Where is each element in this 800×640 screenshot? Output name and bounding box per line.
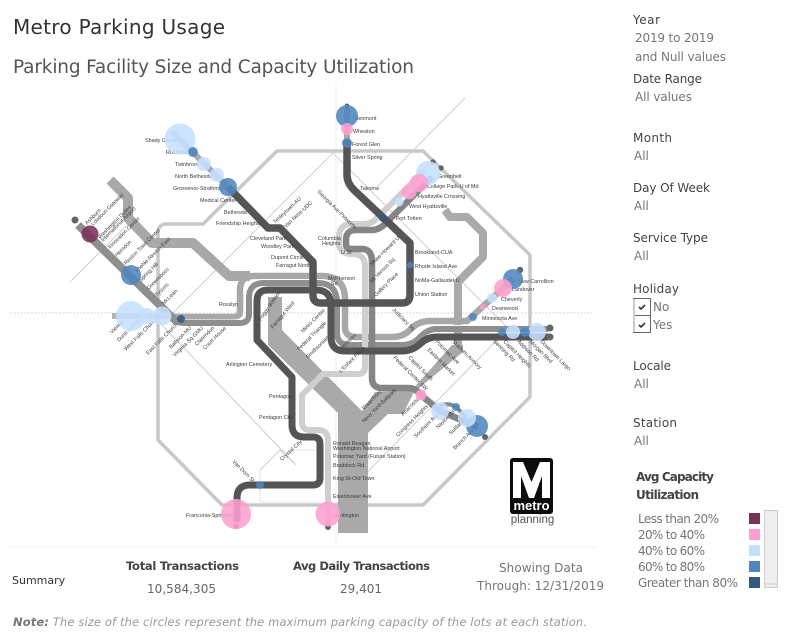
filter: station: Station xyxy=(633,416,677,430)
station labels: Morgan Blvd xyxy=(528,339,553,365)
station labels: Deanwood xyxy=(492,306,518,312)
station labels: Braddock Rd xyxy=(333,463,364,469)
station labels: Rhode Island Ave xyxy=(415,264,457,270)
filter: day of week: Day Of Week xyxy=(633,181,710,195)
station labels: Southern Ave xyxy=(413,412,440,439)
orange line xyxy=(110,180,250,276)
legend: avg capacity utilization: Utilization xyxy=(636,488,699,502)
filter: year: and Null values xyxy=(635,50,726,64)
station labels: Crystal City xyxy=(279,439,304,462)
station labels: West Hyattsville xyxy=(409,204,447,210)
data date note xyxy=(476,561,604,593)
station labels: International Airport xyxy=(100,206,138,243)
station labels: Washington Dulles xyxy=(97,204,133,240)
subtitle: Parking Facility Size and Capacity Utilization xyxy=(13,57,414,78)
station labels: Addison Rd xyxy=(516,339,540,363)
green line xyxy=(346,177,478,427)
station labels: Bethesda xyxy=(224,210,247,216)
station labels: Tenleytown-AU xyxy=(272,196,303,225)
footnote: Note: The size of the circles represent the maximum parking capacity of the lots at each station. xyxy=(13,615,587,629)
station labels: Anacostia xyxy=(400,396,421,417)
circle: Branch Ave xyxy=(466,415,488,437)
filter: day of week: All xyxy=(634,199,649,213)
beltway xyxy=(158,151,530,505)
metro planning logo xyxy=(510,458,554,526)
circle: Grosvenor-Strathmore xyxy=(219,178,237,196)
station labels: Ballston-MU xyxy=(168,325,193,350)
station labels: Branch Ave xyxy=(452,428,476,451)
station labels: Benning Rd xyxy=(492,339,516,363)
station labels: McLean xyxy=(161,289,179,306)
legend: avg capacity utilization: Greater than 80% xyxy=(638,576,738,590)
station labels: Naylor Rd xyxy=(435,409,456,430)
filter: locale: All xyxy=(634,377,649,391)
circle: Franconia-Springfield xyxy=(221,499,251,529)
station labels: Suitland xyxy=(448,418,466,436)
filter: station xyxy=(633,416,677,448)
station labels: Franconia-Springfield xyxy=(186,513,237,519)
station labels: Twinbrook xyxy=(175,162,200,168)
filter: month: All xyxy=(634,149,649,163)
filter: service type: All xyxy=(634,249,649,263)
station labels: Innovation Center xyxy=(107,216,142,250)
white separator xyxy=(183,280,500,341)
circle: Huntington xyxy=(316,502,340,526)
filter: holiday: Holiday xyxy=(633,282,679,296)
station labels: Wiehle-Reston East xyxy=(134,236,172,274)
legend: avg capacity utilization: 40% to 60% xyxy=(638,544,705,558)
station labels: Herndon xyxy=(114,240,133,258)
station labels: Navy Yard-Ballpark xyxy=(361,387,398,424)
circle: Forest Glen xyxy=(342,138,352,148)
station labels: Sq xyxy=(331,281,338,287)
station labels: Eastern Market xyxy=(426,347,456,378)
station labels: Pentagon xyxy=(269,394,292,400)
station labels: Heights xyxy=(322,241,341,247)
station labels: Spring Hill xyxy=(138,262,160,283)
station labels: Farragut North xyxy=(276,263,311,269)
station labels: Takoma xyxy=(360,186,379,192)
station labels: Virginia Sq-GMU xyxy=(172,326,205,358)
circle: Deanwood xyxy=(480,304,486,310)
circle: Suitland xyxy=(458,409,476,427)
data date note: Through: 12/31/2019 xyxy=(476,579,604,593)
station labels: Metro Center xyxy=(300,308,327,334)
station labels: Van Dorn St xyxy=(231,459,256,484)
circle: Glenmont xyxy=(336,105,358,127)
circle: Morgan Blvd xyxy=(520,327,530,337)
circle: North Bethesda xyxy=(210,168,224,182)
station labels: Washington National Airport xyxy=(333,446,400,452)
station labels: Rockville xyxy=(166,150,188,156)
station labels: Federal Triangle xyxy=(296,321,328,352)
station labels: Hyattsville Crossing xyxy=(418,194,465,200)
legend: avg capacity utilization xyxy=(636,470,778,590)
circle: New Carrollton xyxy=(503,269,523,289)
station labels: Cleveland Park xyxy=(250,236,287,242)
filter: holiday: Yes xyxy=(652,318,672,332)
filter: date range xyxy=(633,72,702,104)
station labels: Farragut West xyxy=(270,300,297,330)
data date note: Showing Data xyxy=(499,561,583,575)
circle: West Falls Church xyxy=(152,306,172,326)
KPI: average daily transactions: 29,401 xyxy=(340,582,382,596)
circle: Van Dorn St xyxy=(256,481,264,489)
station labels: Archives xyxy=(339,332,358,351)
circle: Rockville xyxy=(188,147,198,157)
station labels: Congress Heights xyxy=(395,404,430,438)
circle: Shady Grove xyxy=(164,124,196,154)
circle: West Hyattsville xyxy=(394,198,404,206)
station labels: Georgia Ave-Petworth xyxy=(316,189,357,231)
station labels: Waterfront xyxy=(361,389,383,411)
circle: Addison Rd xyxy=(506,325,520,339)
red line upper segments xyxy=(172,108,347,187)
metro planning logo: planning xyxy=(511,514,554,526)
station labels: Forest Glen xyxy=(352,142,380,148)
silver line xyxy=(175,283,548,345)
circle: Southern Ave xyxy=(431,402,449,420)
station labels: Potomac Yard (Future Station) xyxy=(333,454,406,460)
station labels: Capitol Heights xyxy=(502,339,532,369)
circle: Spring Hill xyxy=(121,265,141,285)
metro planning logo: metro xyxy=(513,498,550,513)
station labels: Grosvenor-Strathmore xyxy=(173,186,227,192)
silver line west diagonal xyxy=(78,225,177,322)
circle: Wheaton xyxy=(341,123,353,135)
station badges xyxy=(72,104,554,530)
station labels: Landover xyxy=(512,287,535,293)
circle: Downtown Largo xyxy=(528,323,546,341)
purple line xyxy=(445,210,483,345)
blue line xyxy=(237,290,548,522)
station labels: Clarendon xyxy=(194,326,216,347)
station labels: Shady Grove xyxy=(145,138,176,144)
circle: Hyattsville Crossing xyxy=(402,184,416,200)
station labels: Rosslyn xyxy=(219,302,238,308)
circle: College Park xyxy=(410,174,428,192)
station labels: Columbia xyxy=(318,236,341,242)
filter: holiday xyxy=(633,282,679,332)
station labels: Arlington Cemetery xyxy=(226,362,272,368)
circle: Capitol Heights xyxy=(498,328,506,336)
station labels: McPherson xyxy=(328,276,355,282)
filter: year: 2019 to 2019 xyxy=(635,31,714,45)
DC boundary and river lines xyxy=(70,98,520,503)
station labels: Dupont Circle xyxy=(271,255,304,261)
station labels: Silver Spring xyxy=(352,155,383,161)
station labels: Foggy Bottom xyxy=(258,291,282,322)
station labels: College Park-U of Md xyxy=(427,184,479,190)
KPI: total transactions xyxy=(126,559,239,596)
station labels: Shaw-Howard U xyxy=(369,235,401,267)
station labels: Ashburn xyxy=(84,208,103,226)
station labels: Dunn Loring xyxy=(116,318,141,343)
station labels: Mt Vernon Sq xyxy=(369,257,397,284)
legend: avg capacity utilization: 20% to 40% xyxy=(638,528,705,542)
station labels: West Falls Church xyxy=(123,317,158,352)
station labels: NoMa-Gallaudet U xyxy=(415,278,460,284)
station labels: Tysons xyxy=(154,282,171,298)
filter: date range: Date Range xyxy=(633,72,702,86)
station labels: Fort Totten xyxy=(396,216,422,222)
circle: Greenbelt xyxy=(416,161,440,185)
circle: Rhode Island Ave xyxy=(407,262,413,268)
filter: month xyxy=(633,131,672,163)
station labels: Capitol South xyxy=(407,355,434,382)
circle: Landover xyxy=(494,279,512,297)
filter: locale: Locale xyxy=(633,359,671,373)
filter: year xyxy=(632,13,726,64)
station labels: Smithsonian xyxy=(305,335,330,360)
station labels: Greensboro xyxy=(146,267,171,291)
legend: avg capacity utilization: 60% to 80% xyxy=(638,560,705,574)
filter: day of week xyxy=(633,181,710,213)
station labels: Medical Center xyxy=(200,198,236,204)
station labels: U St xyxy=(341,250,352,256)
station labels: Reston Town Center xyxy=(123,228,162,266)
circle: Minnesota Ave xyxy=(469,313,477,321)
station labels: Stadium-Armory xyxy=(451,339,483,371)
station labels: Union Station xyxy=(415,292,447,298)
station labels xyxy=(84,116,571,519)
station labels: King St-Old Town xyxy=(333,476,375,482)
station labels: L'Enfant Plaza xyxy=(338,346,367,374)
green line branch xyxy=(440,404,467,418)
legend: avg capacity utilization: Avg Capacity xyxy=(636,470,714,484)
filter: month: Month xyxy=(633,131,672,145)
circle: Anacostia xyxy=(416,390,426,400)
station labels: Wheaton xyxy=(353,129,375,135)
station labels: North Bethesda xyxy=(175,174,212,180)
KPI: total transactions: 10,584,305 xyxy=(147,582,216,596)
station labels: Friendship Heights xyxy=(216,221,261,227)
station labels: Downtown Largo xyxy=(539,339,571,372)
filter: holiday: No xyxy=(653,300,669,314)
KPI: average daily transactions: Avg Daily Transactions xyxy=(293,559,430,573)
red line xyxy=(228,140,410,303)
filter: service type: Service Type xyxy=(633,231,708,245)
station labels: Potomac Ave xyxy=(434,339,460,366)
circle: East Falls Church xyxy=(177,315,185,323)
filter: station: All xyxy=(634,434,649,448)
station labels: New Carrollton xyxy=(518,279,554,285)
circle: Vienna xyxy=(116,301,146,331)
station labels: Pentagon City xyxy=(259,415,293,421)
filter: year: Year xyxy=(632,13,660,27)
station labels: Huntington xyxy=(333,513,359,519)
legend: avg capacity utilization: Less than 20% xyxy=(638,512,719,526)
thick river band xyxy=(268,297,463,533)
title: Metro Parking Usage xyxy=(13,15,225,39)
orange line ring and east branch xyxy=(175,276,513,337)
station labels: Loudoun Gateway xyxy=(90,192,126,227)
circle: Dunn Loring xyxy=(139,308,155,324)
circle: Fort Totten xyxy=(379,214,387,222)
summary label: Summary xyxy=(12,574,66,587)
station labels: Brookland-CUA xyxy=(415,250,453,256)
station labels: Court House xyxy=(202,326,228,351)
station labels: Eisenhower Ave xyxy=(333,494,372,500)
circle: Loudoun Gateway xyxy=(82,226,98,242)
yellow line xyxy=(302,170,425,525)
station labels: Glenmont xyxy=(353,116,377,122)
KPI: average daily transactions xyxy=(293,559,430,596)
station labels: Judiciary Sq xyxy=(391,307,416,332)
metro system map xyxy=(10,85,596,547)
station labels: Ronald Reagan xyxy=(333,441,370,447)
filter: locale xyxy=(633,359,671,391)
station labels: Cheverly xyxy=(501,297,523,303)
station labels: Vienna xyxy=(109,319,125,335)
station labels: Gallery Place xyxy=(373,271,400,298)
station labels: East Falls Church xyxy=(145,322,179,356)
silver line west stub xyxy=(112,313,170,319)
station labels: Minnesota Ave xyxy=(482,316,517,322)
circle: Cheverly xyxy=(487,293,497,303)
circle: Twinbrook xyxy=(197,157,211,171)
station labels: Woodley Park xyxy=(261,244,295,250)
filter: service type xyxy=(633,231,708,263)
circle: Naylor Rd xyxy=(452,403,460,411)
filter: date range: All values xyxy=(635,90,692,104)
station labels: Greenbelt xyxy=(438,174,462,180)
KPI: total transactions: Total Transactions xyxy=(126,559,239,573)
station capacity circles xyxy=(82,105,546,529)
station labels: Van Ness-UDC xyxy=(283,200,314,229)
station labels: Federal Center SW xyxy=(392,355,429,393)
